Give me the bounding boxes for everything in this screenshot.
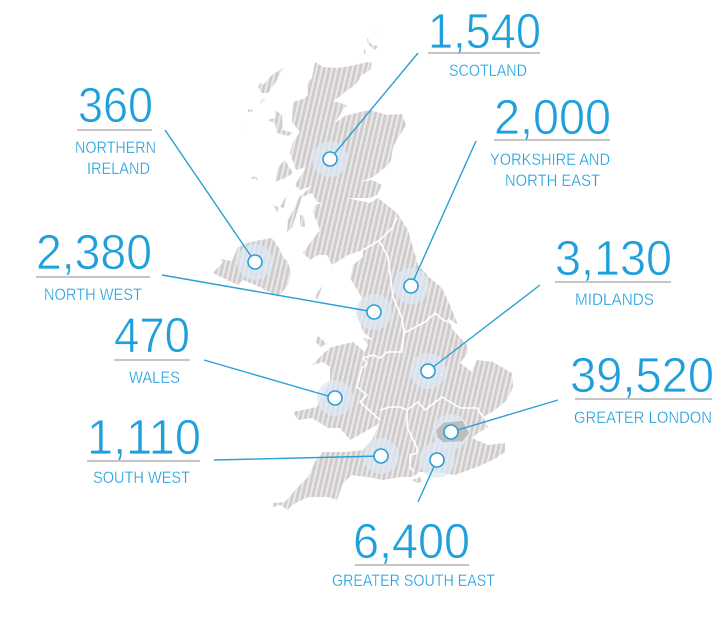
label: Greater South East: 6,400 bbox=[353, 515, 470, 569]
label: North West: NORTH WEST bbox=[44, 286, 142, 304]
label: Northern Ireland: NORTHERN bbox=[75, 139, 156, 157]
label: Greater London bbox=[570, 349, 714, 427]
land: Isle of Man, Anglesey, Isle of Wight bbox=[315, 285, 422, 483]
land: Scottish islands bbox=[246, 30, 378, 227]
label: Greater South East bbox=[332, 515, 495, 590]
label: Greater London: GREATER LONDON bbox=[574, 409, 712, 427]
label: Midlands: 3,130 bbox=[555, 232, 672, 286]
label: Yorkshire and North East: YORKSHIRE AND bbox=[490, 151, 610, 169]
label: Yorkshire and North East bbox=[490, 91, 611, 190]
label: Northern Ireland bbox=[75, 79, 156, 178]
label: North West bbox=[36, 226, 152, 304]
marker: Greater South East bbox=[430, 453, 444, 467]
region borders bbox=[357, 217, 483, 472]
map of the UK bbox=[213, 30, 513, 510]
label: Scotland: SCOTLAND bbox=[449, 62, 527, 80]
label: Wales: WALES bbox=[129, 369, 180, 387]
label: Greater South East: GREATER SOUTH EAST bbox=[332, 572, 495, 590]
label: South West bbox=[87, 411, 201, 487]
label: Midlands: MIDLANDS bbox=[575, 291, 654, 309]
label: Northern Ireland: IRELAND bbox=[87, 160, 150, 178]
label: Midlands bbox=[555, 232, 672, 309]
marker: Yorkshire and North East bbox=[404, 279, 418, 293]
label: Scotland: 1,540 bbox=[428, 5, 541, 59]
label: Northern Ireland: 360 bbox=[78, 79, 153, 133]
marker: South West bbox=[374, 449, 388, 463]
label: Scotland bbox=[428, 5, 541, 80]
label: Yorkshire and North East: 2,000 bbox=[494, 91, 611, 145]
leader lines bbox=[162, 53, 558, 502]
label: Wales bbox=[114, 309, 190, 387]
land: Great Britain bbox=[273, 62, 513, 510]
land: Northern Ireland bbox=[213, 238, 291, 297]
marker: Wales bbox=[328, 391, 342, 405]
marker: North West bbox=[367, 305, 381, 319]
marker: Midlands bbox=[421, 364, 435, 378]
label: Yorkshire and North East: NORTH EAST bbox=[505, 172, 600, 190]
label: Wales: 470 bbox=[114, 309, 190, 363]
marker: Scotland bbox=[323, 152, 337, 166]
label: South West: SOUTH WEST bbox=[93, 469, 190, 487]
marker: Greater London bbox=[444, 425, 458, 439]
label: North West: 2,380 bbox=[36, 226, 152, 280]
marker: Northern Ireland bbox=[248, 255, 262, 269]
glow halos bbox=[237, 141, 469, 478]
label: South West: 1,110 bbox=[87, 411, 201, 465]
label: Greater London: 39,520 bbox=[570, 349, 714, 403]
region: Greater London bbox=[435, 420, 470, 443]
